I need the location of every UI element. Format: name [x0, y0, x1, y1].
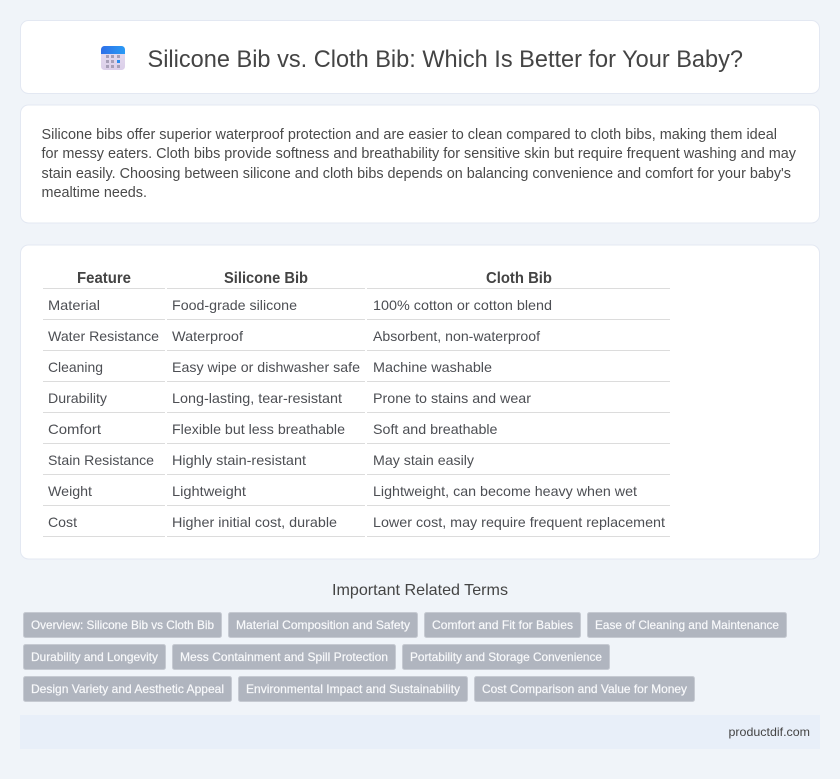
table row: cost: Lower cost, may require frequent replacement — [373, 514, 665, 530]
table row: stain resistance: May stain easily — [373, 452, 474, 468]
table row: weight — [48, 483, 637, 499]
table header row: Cloth Bib — [486, 270, 552, 287]
table row: stain resistance: Stain Resistance — [48, 452, 154, 468]
tag — [172, 644, 396, 670]
table row: comfort: Flexible but less breathable — [172, 421, 345, 437]
table row: cleaning: Machine washable — [373, 359, 492, 375]
table row: cost: Cost — [48, 514, 77, 530]
table row: cleaning: Cleaning — [48, 359, 103, 375]
panel: title header — [20, 20, 820, 94]
table row: material: Food-grade silicone — [172, 297, 297, 313]
table row: material: 100% cotton or cotton blend — [373, 297, 552, 313]
icon: calendar — [101, 46, 125, 70]
tag — [24, 676, 232, 702]
text block: summary paragraph: mealtime needs. — [42, 185, 147, 201]
table row: cleaning — [48, 359, 492, 375]
title: Silicone Bib vs. Cloth Bib: Which Is Better for Your Baby? — [148, 46, 743, 73]
table row: durability: Long-lasting, tear-resistant — [172, 390, 342, 406]
tag — [24, 612, 222, 638]
panel: comparison table — [20, 245, 820, 559]
tag — [424, 612, 580, 638]
tag: Mess Containment and Spill Protection — [180, 650, 388, 664]
tag — [402, 644, 610, 670]
tag — [474, 676, 694, 702]
text block: summary paragraph: stain easily. Choosing between silicone and cloth bibs depends on balancing convenience and comfort for your baby's — [42, 166, 791, 182]
tag: Material Composition and Safety — [236, 618, 410, 632]
related term tags — [24, 612, 786, 702]
tag — [228, 612, 418, 638]
tag: Environmental Impact and Sustainability — [246, 682, 460, 696]
table row: water resistance: Waterproof — [172, 328, 243, 344]
table row: material — [48, 297, 552, 313]
footer — [20, 715, 820, 749]
table row: comfort — [48, 421, 498, 437]
table header row: Feature — [77, 270, 131, 287]
table row: weight: Lightweight — [172, 483, 246, 499]
heading: related terms: Important Related Terms — [332, 582, 508, 599]
table row: cleaning: Easy wipe or dishwasher safe — [172, 359, 360, 375]
text block: summary paragraph — [42, 127, 797, 201]
table row: material: Material — [48, 297, 100, 313]
tag: Ease of Cleaning and Maintenance — [595, 618, 779, 632]
table header row: Silicone Bib — [224, 270, 308, 287]
table header row — [77, 270, 552, 287]
table row: durability — [48, 390, 531, 406]
tag: Overview: Silicone Bib vs Cloth Bib — [31, 618, 214, 632]
table row: water resistance: Absorbent, non-waterproof — [373, 328, 540, 344]
table row: water resistance — [48, 328, 540, 344]
tag: Durability and Longevity — [31, 650, 158, 664]
panel: summary — [20, 105, 820, 223]
table row: comfort: Soft and breathable — [373, 421, 498, 437]
table row: cost: Higher initial cost, durable — [172, 514, 337, 530]
text block: summary paragraph: for messy eaters. Cloth bibs provide softness and breathability for sensitive skin but require frequent washing and may — [42, 146, 797, 162]
tag — [238, 676, 468, 702]
table row: durability: Durability — [48, 390, 107, 406]
table row: comfort: Comfort — [48, 421, 101, 437]
table row: weight: Lightweight, can become heavy when wet — [373, 483, 637, 499]
tag: Design Variety and Aesthetic Appeal — [31, 682, 224, 696]
text block: summary paragraph: Silicone bibs offer superior waterproof protection and are easier to clean compared to cloth bibs, making them ideal — [42, 127, 777, 143]
table row: stain resistance — [48, 452, 474, 468]
table row: weight: Weight — [48, 483, 92, 499]
tag: Comfort and Fit for Babies — [432, 618, 573, 632]
table row: stain resistance: Highly stain-resistant — [172, 452, 306, 468]
tag: Portability and Storage Convenience — [410, 650, 602, 664]
tag — [588, 612, 786, 638]
table row: water resistance: Water Resistance — [48, 328, 159, 344]
table row: durability: Prone to stains and wear — [373, 390, 531, 406]
footer source: productdif.com — [728, 725, 810, 739]
tag: Cost Comparison and Value for Money — [482, 682, 687, 696]
table row: cost — [48, 514, 665, 530]
tag — [24, 644, 166, 670]
